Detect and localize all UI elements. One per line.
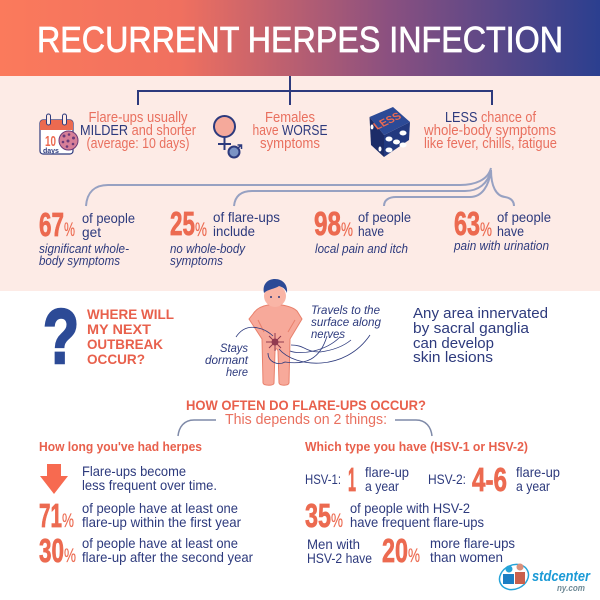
- stat: 30 percent: 30: [39, 532, 64, 569]
- header band: [0, 0, 600, 76]
- stat: 71 percent: %: [62, 511, 74, 532]
- stat: 25 percent: include: [213, 223, 255, 239]
- stat: 30 percent: of people have at least one: [82, 535, 238, 551]
- heading: where will my next outbreak occur: MY NEXT: [87, 321, 151, 337]
- label: travels to the surface: [311, 303, 381, 341]
- text: less chance: LESS chance of: [445, 110, 537, 126]
- heading: where will my next outbreak occur: OCCUR?: [87, 351, 145, 367]
- stat: 20 percent: 20: [382, 532, 408, 569]
- stat: HSV-2 four to six flare-ups: [428, 461, 560, 498]
- stat: 35 percent: 35: [305, 497, 331, 534]
- connector: curves to columns: [178, 420, 432, 436]
- text: less chance: whole-body symptoms: [423, 123, 556, 139]
- stat: HSV-1 one flare-up: flare-up: [365, 464, 409, 480]
- text: less frequent: Flare-ups become: [82, 463, 186, 479]
- stat: 20 percent: [307, 532, 515, 569]
- text: less chance: like fever, chills, fatigue: [424, 136, 557, 152]
- text: females worse: [252, 110, 328, 152]
- stat: HSV-2 four to six flare-ups: 4-6: [472, 461, 507, 498]
- heading: where will my next outbreak occur: OUTBREAK: [87, 336, 163, 352]
- text: less frequent: less frequent over time.: [82, 477, 217, 493]
- stat: HSV-2 four to six flare-ups: flare-up: [516, 464, 560, 480]
- icon: calendar with brain: days: [43, 148, 59, 155]
- text: sacral ganglia: [413, 305, 548, 366]
- text: sacral ganglia: can develop: [413, 335, 494, 352]
- text: sacral ganglia: Any area innervated: [413, 305, 548, 322]
- stat: 98 percent: 98: [314, 205, 341, 242]
- text: milder flare-ups: [80, 110, 196, 152]
- text: females worse: have WORSE: [252, 123, 328, 139]
- subheading: which type: Which type you have (HSV-1 or HSV-2): [305, 439, 528, 454]
- stat: 71 percent: flare-up within the first year: [82, 514, 241, 530]
- icon: down arrow: [40, 464, 68, 494]
- stat: 30 percent: flare-up after the second year: [82, 549, 253, 565]
- stat: 63 percent: [453, 205, 551, 253]
- label: travels to the surface: surface along: [311, 315, 381, 329]
- stat: 67 percent: significant whole-: [39, 242, 129, 256]
- stat: 98 percent: [314, 205, 411, 256]
- heading: how often do flare-ups occur: HOW OFTEN DO FLARE-UPS OCCUR?: [186, 397, 426, 413]
- stat: 25 percent: [170, 205, 280, 268]
- text: milder flare-ups: MILDER and shorter: [80, 123, 196, 139]
- panel: background pink: [0, 76, 600, 291]
- stat: 25 percent: of flare-ups: [213, 209, 280, 225]
- icon: calendar with brain: [40, 114, 78, 155]
- stat: 20 percent: HSV-2 have: [307, 550, 372, 566]
- label: stays dormant here: [205, 341, 249, 379]
- heading: how often do flare-ups occur: [186, 397, 426, 428]
- stat: 35 percent: of people with HSV-2: [350, 500, 470, 516]
- stat: 20 percent: more flare-ups: [430, 535, 515, 551]
- stat: 35 percent: [305, 497, 484, 534]
- panel: which type you have: [305, 439, 560, 569]
- text: less chance: [423, 110, 557, 152]
- text: sacral ganglia: skin lesions: [413, 349, 493, 366]
- stat: 71 percent: [39, 497, 241, 534]
- label: travels to the surface: Travels to the: [311, 303, 380, 317]
- logo: stdcenter ny.com: [495, 560, 591, 594]
- label: stays dormant here: Stays: [220, 341, 248, 355]
- text: sacral ganglia: by sacral ganglia: [413, 320, 530, 337]
- label: travels to the surface: nerves: [311, 327, 345, 341]
- stat: 25 percent: 25: [170, 205, 195, 242]
- label: stays dormant here: dormant: [205, 353, 249, 367]
- stat: 67 percent: [39, 206, 135, 268]
- stat: 67 percent: %: [64, 220, 75, 241]
- stat: 71 percent: 71: [39, 497, 62, 534]
- stat: 67 percent: get: [82, 224, 101, 240]
- panel: how long you've had herpes: [39, 439, 253, 569]
- text: females worse: Females: [265, 110, 315, 126]
- stat: 63 percent: %: [480, 220, 492, 241]
- stat: 71 percent: of people have at least one: [82, 500, 238, 516]
- stat: 35 percent: have frequent flare-ups: [350, 514, 484, 530]
- stat: 98 percent: local pain and itch: [315, 242, 408, 256]
- text: less frequent: [82, 463, 217, 493]
- stat: HSV-2 four to six flare-ups: a year: [516, 478, 550, 494]
- stat: 20 percent: Men with: [307, 536, 360, 552]
- stat: 98 percent: have: [358, 223, 384, 239]
- stat: 20 percent: %: [408, 546, 420, 567]
- stat: 63 percent: have: [497, 223, 524, 239]
- connector: curved brackets to stats: [86, 168, 514, 206]
- icon: calendar with brain: 10: [45, 133, 56, 150]
- stat: HSV-2 four to six flare-ups: HSV-2:: [428, 471, 466, 487]
- subheading: how long: How long you've had herpes: [39, 439, 202, 454]
- connector: top bracket: [138, 76, 492, 105]
- stat: 98 percent: of people: [358, 209, 411, 225]
- figure: human body with nerves: [236, 279, 370, 385]
- stat: HSV-1 one flare-up: HSV-1:: [305, 471, 341, 487]
- stat: 63 percent: 63: [454, 205, 480, 242]
- stat: 63 percent: of people: [497, 209, 551, 225]
- stat: 25 percent: %: [195, 220, 207, 241]
- stat: HSV-1 one flare-up: a year: [365, 478, 399, 494]
- label: stays dormant here: here: [226, 365, 248, 379]
- logo: stdcenter ny.com: ny.com: [557, 583, 585, 593]
- heading: how often do flare-ups occur: This depends on 2 things:: [225, 412, 387, 428]
- heading: where will my next outbreak occur: [87, 306, 174, 367]
- text: milder flare-ups: Flare-ups usually: [88, 110, 188, 126]
- stat: 35 percent: %: [331, 511, 343, 532]
- icon: dice with LESS: [370, 107, 410, 157]
- icon: dice with LESS: LESS: [371, 110, 404, 132]
- stat: 30 percent: %: [64, 546, 76, 567]
- stat: 30 percent: [39, 532, 253, 569]
- heading: where will my next outbreak occur: WHERE WILL: [87, 306, 174, 322]
- icon: female and male symbols: [214, 116, 242, 158]
- stat: 67 percent: of people: [82, 210, 135, 226]
- icon: question mark: ?: [43, 294, 79, 380]
- stat: 63 percent: pain with urination: [453, 239, 549, 253]
- stat: 67 percent: 67: [39, 206, 64, 243]
- stat: 67 percent: body symptoms: [39, 254, 120, 268]
- stat: 98 percent: %: [341, 220, 353, 241]
- stat: HSV-1 one flare-up: 1: [348, 461, 356, 498]
- stat: 20 percent: than women: [430, 549, 503, 565]
- text: milder flare-ups: (average: 10 days): [86, 136, 190, 152]
- stat: HSV-1 one flare-up: [305, 461, 409, 498]
- text: females worse: symptoms: [260, 136, 320, 152]
- stat: 25 percent: no whole-body: [170, 242, 246, 256]
- logo: stdcenter ny.com: stdcenter: [532, 568, 591, 585]
- stat: 25 percent: symptoms: [170, 254, 223, 268]
